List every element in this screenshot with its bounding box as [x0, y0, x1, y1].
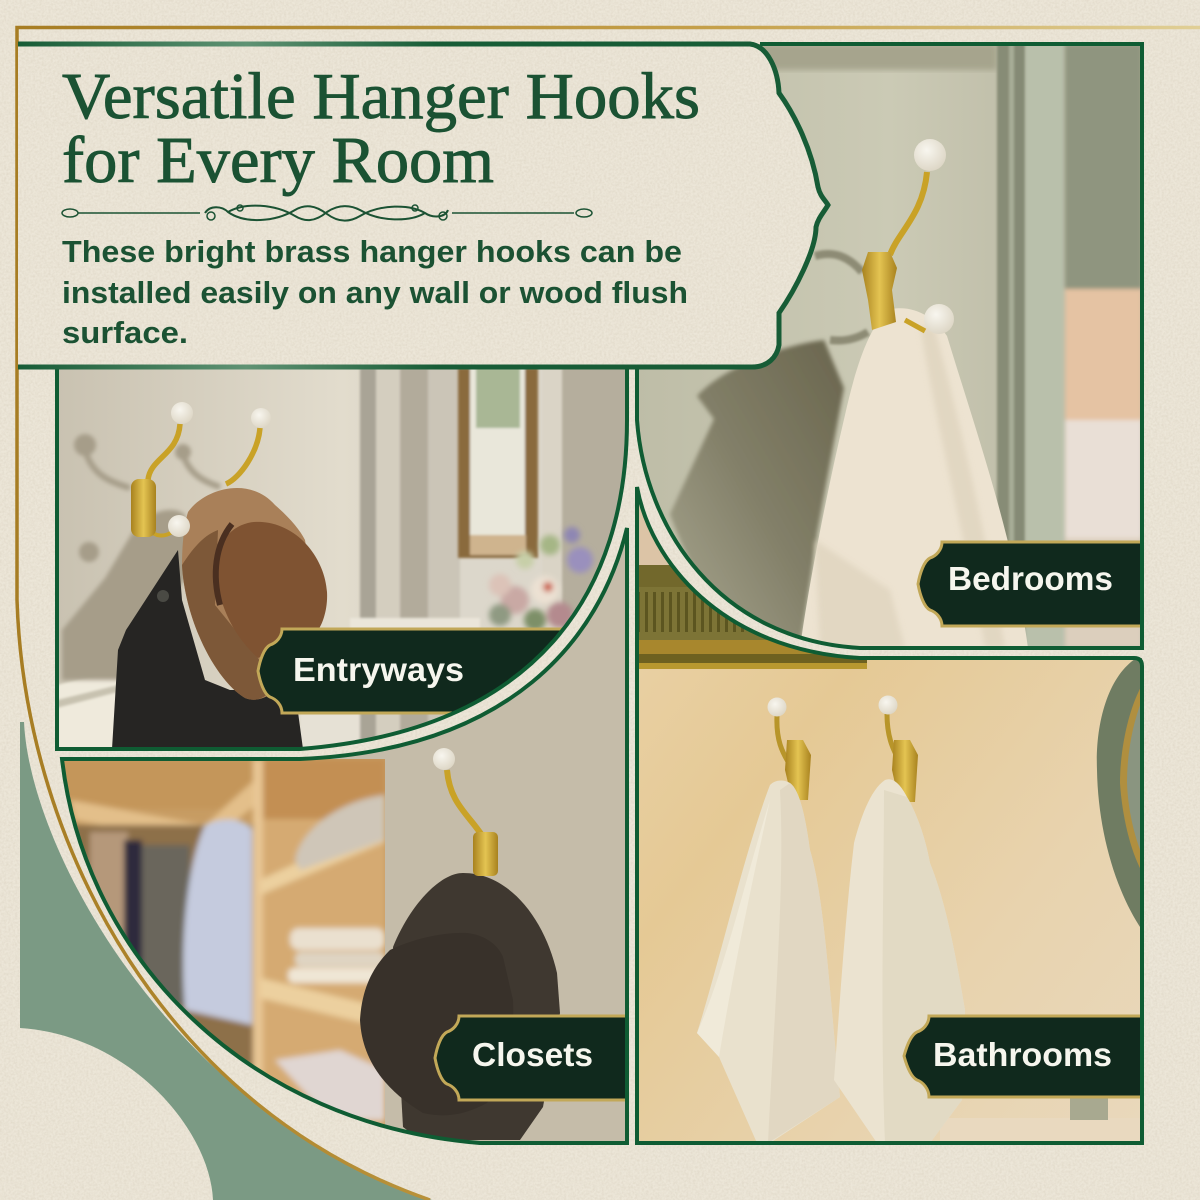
panel: closets: [62, 528, 700, 1143]
entryways photo: [59, 370, 625, 747]
closets photo: [62, 528, 700, 1143]
right towel: [834, 779, 965, 1143]
brim shadow: [182, 530, 275, 700]
label: bathrooms: Bathrooms: [933, 1036, 1112, 1073]
hook and towel shadow: [670, 254, 868, 648]
label: bedrooms: [918, 542, 1160, 626]
label: bedrooms: Bedrooms: [948, 560, 1113, 597]
left brass hook: [768, 698, 811, 800]
round mirror: [1097, 655, 1142, 930]
hat band: [216, 524, 232, 605]
title card fill: [18, 44, 828, 367]
coat: [112, 550, 303, 749]
hat brim: [393, 873, 560, 1140]
ornamental divider: [62, 205, 592, 221]
hook shadows: [62, 434, 220, 680]
heading: for Every Room: [62, 124, 494, 197]
vanity and jar: [940, 1098, 1142, 1143]
hat crown: [360, 933, 513, 1115]
left towel: [697, 781, 840, 1143]
hat brim: [182, 488, 306, 700]
title card border: [18, 44, 828, 367]
closet shelves: [62, 759, 385, 1129]
label: entryways: [256, 628, 562, 714]
hat crown: [215, 522, 327, 658]
closets border: [62, 528, 627, 1143]
closet wall: [300, 528, 627, 1143]
gold mirror frame: [637, 565, 867, 669]
towel: [800, 308, 1028, 648]
panel: title card: [18, 44, 830, 367]
entryways border: [57, 368, 627, 749]
panel: bedrooms: [637, 44, 1160, 648]
room behind: [1065, 44, 1142, 648]
flowers: [489, 527, 593, 631]
right brass hook: [878, 696, 918, 802]
bathrooms photo: [637, 487, 1160, 1143]
title card paper grain: [18, 44, 830, 367]
panel: entryways: [55, 370, 629, 751]
panel: bathrooms: [637, 487, 1160, 1143]
picture frame: [458, 368, 538, 558]
description text: installed easily on any wall or wood flush: [62, 275, 688, 310]
dark hat: [360, 873, 560, 1140]
bedrooms border: [637, 44, 1142, 648]
description text: surface.: [62, 315, 188, 350]
label: bathrooms: [904, 1016, 1160, 1097]
brass hook: [131, 402, 271, 537]
sage green corner shape: [20, 722, 432, 1200]
bathrooms border: [637, 487, 1142, 1143]
brass hook: [862, 139, 954, 334]
heading: Versatile Hanger Hooks: [62, 60, 700, 133]
label: closets: Closets: [472, 1036, 593, 1073]
brass hook: [433, 748, 498, 876]
label: closets: [435, 1016, 700, 1100]
window moldings: [997, 44, 1065, 648]
label: entryways: Entryways: [293, 651, 464, 688]
wainscot: [59, 678, 116, 747]
description text: These bright brass hanger hooks can be: [62, 234, 682, 269]
bedrooms photo: [637, 44, 1160, 648]
